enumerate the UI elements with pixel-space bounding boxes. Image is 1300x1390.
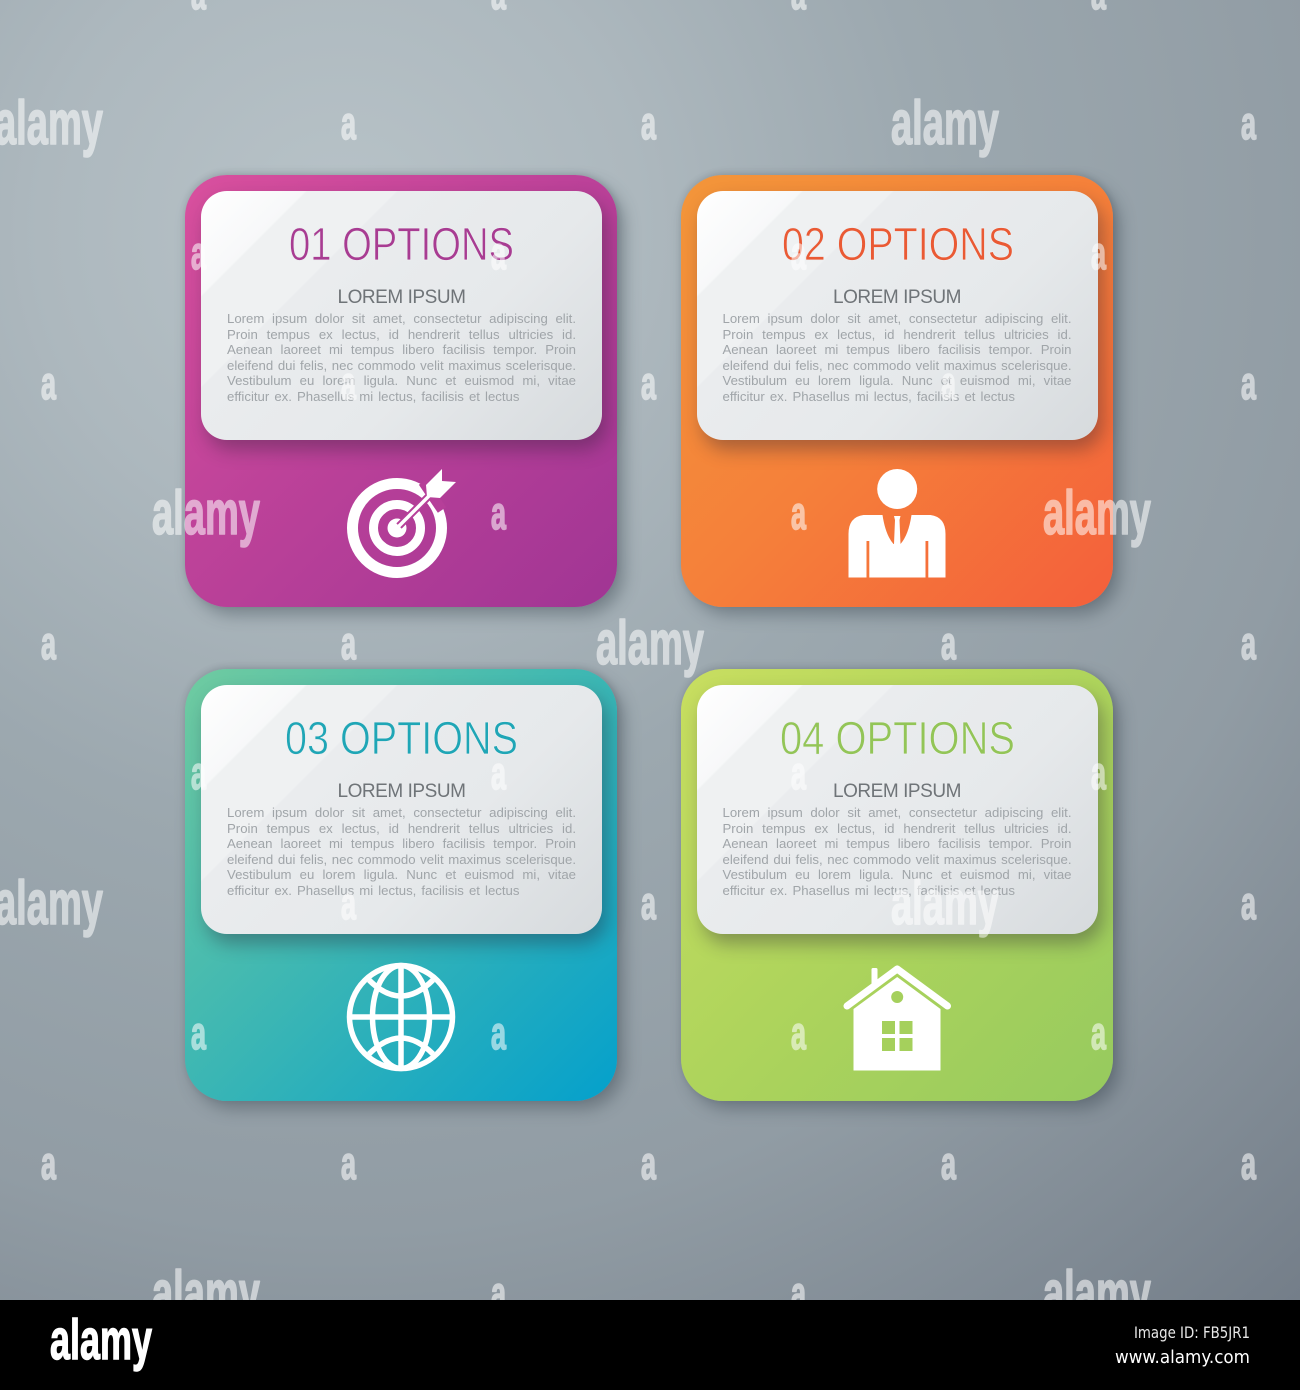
card 02: orange options [680, 175, 1112, 607]
body text: Lorem ipsum dolor sit amet, consectetur adipiscing elit. [227, 805, 576, 820]
body text: Lorem ipsum dolor sit amet, consectetur adipiscing elit. [227, 311, 576, 326]
watermarks: a [41, 357, 56, 409]
body text: Proin tempus ex lectus, id hendrerit tellus ultricies id. [227, 820, 576, 836]
body text [227, 805, 576, 898]
footer bar [0, 1300, 1300, 1390]
subheading: LOREM IPSUM [337, 287, 466, 308]
watermarks: a [941, 357, 956, 409]
watermarks: a [941, 1137, 956, 1189]
watermarks: a [1241, 357, 1256, 409]
watermarks: a [341, 877, 356, 929]
body text: Aenean laoreet mi tempus libero facilisis tempor. Proin [227, 342, 576, 357]
body text: Proin tempus ex lectus, id hendrerit tellus ultricies id. [227, 326, 576, 342]
watermarks: a [941, 617, 956, 669]
body text: eleifend dui felis, nec commodo velit maximus scelerisque. [722, 358, 1072, 372]
watermarks: a [1091, 747, 1106, 799]
watermarks: a [191, 227, 206, 279]
watermarks: a [1091, 1007, 1106, 1059]
watermarks: a [41, 1137, 56, 1189]
watermarks: a [641, 877, 656, 929]
watermarks: a [191, 747, 206, 799]
body text: Vestibulum eu lorem ligula. Nunc et euismod mi, vitae [722, 867, 1072, 882]
watermarks: a [641, 357, 656, 409]
body text [227, 311, 576, 404]
watermarks: a [491, 747, 506, 799]
watermarks: alamy [1043, 1259, 1151, 1328]
body text: Vestibulum eu lorem ligula. Nunc et euismod mi, vitae [227, 373, 576, 388]
watermarks: a [41, 617, 56, 669]
watermarks: a [341, 357, 356, 409]
subheading: LOREM IPSUM [833, 287, 961, 308]
body text: Aenean laoreet mi tempus libero facilisis tempor. Proin [722, 836, 1072, 851]
watermarks: a [491, 1267, 506, 1319]
icon: globe [346, 962, 456, 1072]
body text: efficitur ex. Phasellus mi lectus, facilisis et lectus [227, 882, 519, 898]
footer logo and image id: alamy [50, 1308, 152, 1372]
card 01: purple options [185, 175, 617, 607]
body text: Lorem ipsum dolor sit amet, consectetur adipiscing elit. [722, 311, 1072, 326]
card 04: green options [680, 669, 1112, 1101]
icon: house [844, 965, 951, 1070]
watermarks: alamy [152, 479, 260, 548]
watermarks: a [491, 1007, 506, 1059]
watermarks: alamy [891, 89, 999, 158]
body text: efficitur ex. Phasellus mi lectus, facilisis et lectus [722, 882, 1015, 898]
footer logo and image id: Image ID: FB5JR1 [1134, 1323, 1250, 1342]
footer logo and image id [50, 1308, 1250, 1372]
watermarks: a [791, 487, 806, 539]
body text: eleifend dui felis, nec commodo velit maximus scelerisque. [227, 358, 576, 372]
watermarks: a [641, 1137, 656, 1189]
subheading: LOREM IPSUM [337, 781, 466, 802]
panel: 03 text [201, 685, 602, 934]
body text: Lorem ipsum dolor sit amet, consectetur adipiscing elit. [722, 805, 1072, 820]
body text: Proin tempus ex lectus, id hendrerit tellus ultricies id. [722, 326, 1072, 342]
subheading: LOREM IPSUM [833, 781, 961, 802]
body text [722, 311, 1072, 404]
body text: efficitur ex. Phasellus mi lectus, facilisis et lectus [227, 388, 519, 404]
body text: Vestibulum eu lorem ligula. Nunc et euismod mi, vitae [227, 867, 576, 882]
watermarks: alamy [596, 609, 704, 678]
card 03: teal options [185, 669, 617, 1101]
watermarks: a [191, 1007, 206, 1059]
watermarks: a [1241, 617, 1256, 669]
watermarks: alamy [0, 89, 103, 158]
body text: Vestibulum eu lorem ligula. Nunc et euismod mi, vitae [722, 373, 1072, 388]
body text: Proin tempus ex lectus, id hendrerit tellus ultricies id. [722, 820, 1072, 836]
panel: 02 text [696, 191, 1098, 440]
watermarks: a [791, 747, 806, 799]
watermarks: a [1241, 97, 1256, 149]
watermarks: a [491, 227, 506, 279]
watermarks: alamy [1043, 479, 1151, 548]
watermarks: a [1241, 1137, 1256, 1189]
body text: eleifend dui felis, nec commodo velit maximus scelerisque. [722, 852, 1072, 866]
watermarks: alamy [891, 869, 999, 938]
watermarks: a [641, 97, 656, 149]
body text: Aenean laoreet mi tempus libero facilisis tempor. Proin [227, 836, 576, 851]
panel: 04 text [696, 685, 1098, 934]
body text: Aenean laoreet mi tempus libero facilisis tempor. Proin [722, 342, 1072, 357]
watermarks: a [1091, 227, 1106, 279]
panel: 01 text [201, 191, 602, 440]
icon: target with arrow [347, 469, 456, 578]
watermarks: a [791, 227, 806, 279]
watermarks: a [791, 1007, 806, 1059]
watermarks: alamy [152, 1259, 260, 1328]
footer logo and image id: www.alamy.com [1115, 1347, 1250, 1368]
body text [722, 805, 1072, 898]
watermarks: a [791, 1267, 806, 1319]
watermarks: a [1241, 877, 1256, 929]
icon: businessman [848, 469, 946, 578]
body text: eleifend dui felis, nec commodo velit maximus scelerisque. [227, 852, 576, 866]
watermarks: alamy [0, 869, 103, 938]
body text: efficitur ex. Phasellus mi lectus, facilisis et lectus [722, 388, 1015, 404]
watermarks: a [341, 617, 356, 669]
watermarks: a [341, 97, 356, 149]
watermarks: a [341, 1137, 356, 1189]
watermarks: a [491, 487, 506, 539]
